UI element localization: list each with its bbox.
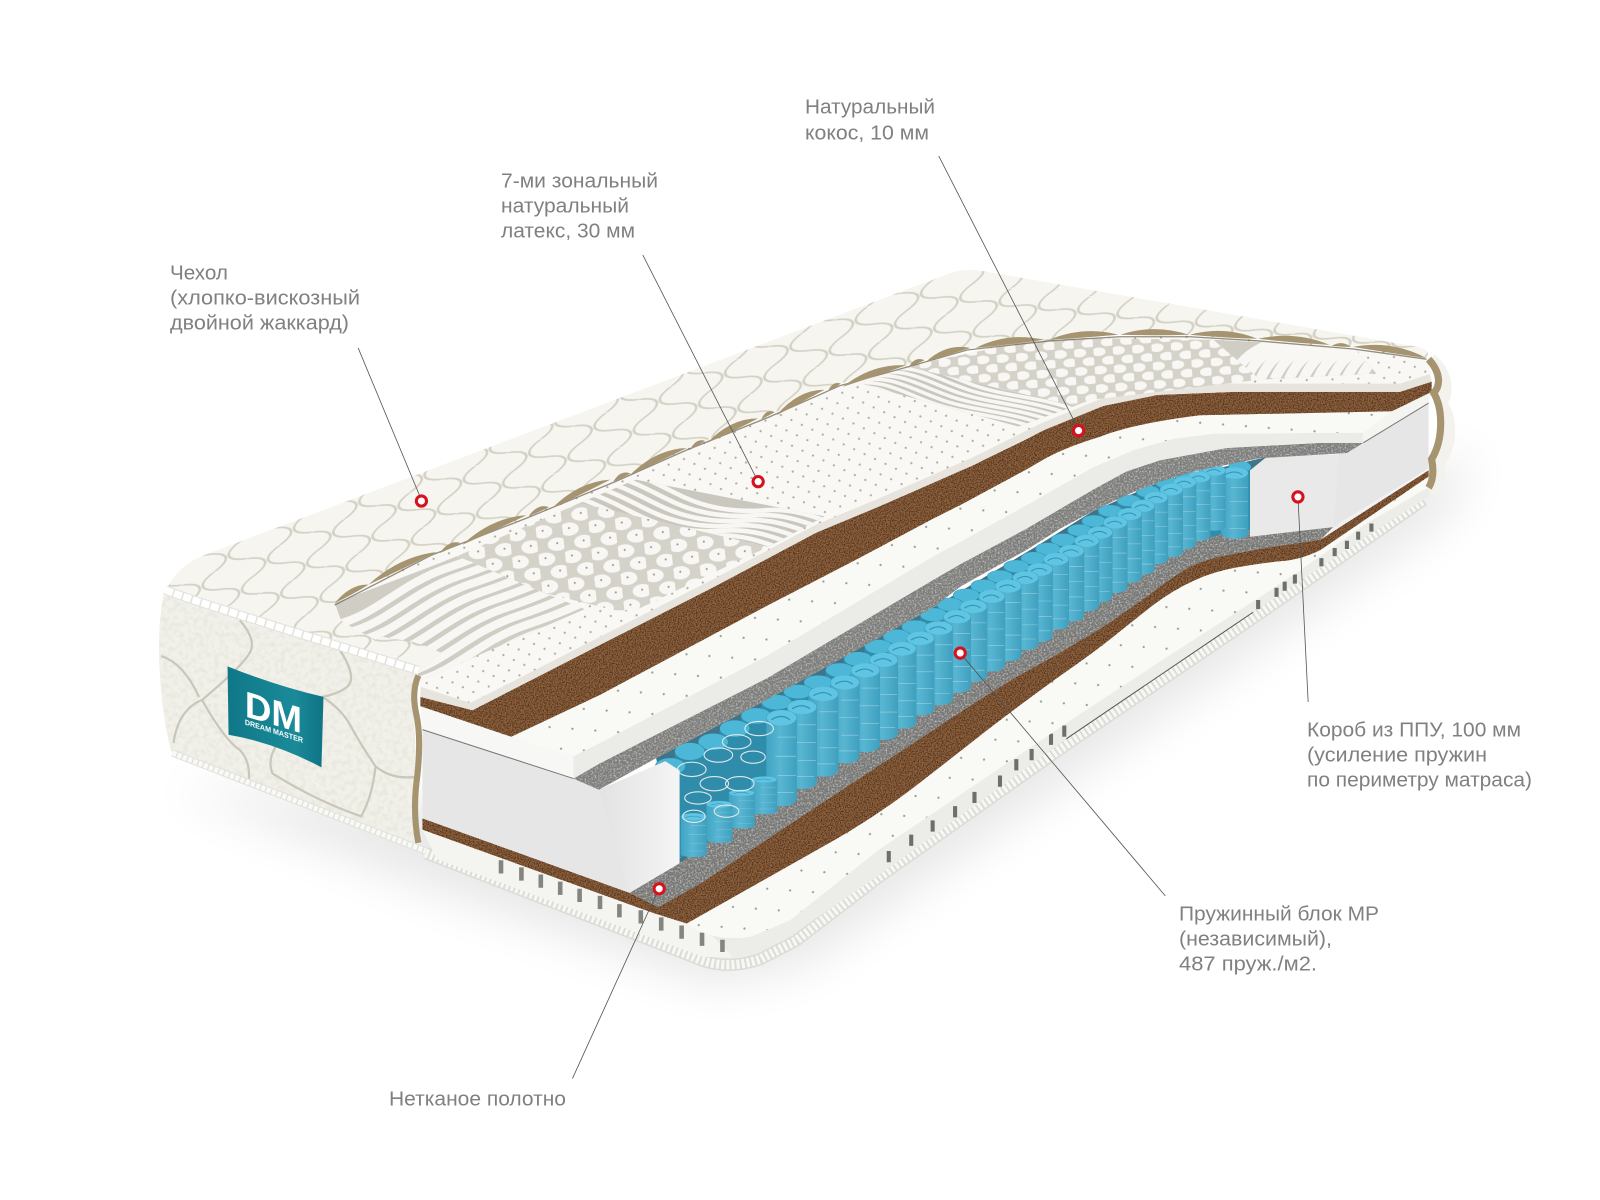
wave zone four — [1214, 340, 1376, 380]
cover cut edge scallops — [335, 329, 1427, 603]
latex side face — [573, 433, 1363, 779]
side lower rope — [172, 753, 426, 851]
bottom latex layer — [422, 477, 1430, 957]
bottom piping cord — [426, 500, 1423, 965]
label: foam box: по периметру матраса) — [1307, 770, 1532, 792]
label: latex — [501, 170, 658, 242]
bare wire springs — [678, 721, 773, 822]
floor shadow — [168, 449, 1474, 985]
upper latex layer — [420, 392, 1432, 779]
zoned latex edge — [335, 335, 1432, 710]
leader lines — [358, 156, 1308, 1079]
label: latex: 7-ми зональный — [501, 170, 658, 192]
cover seam shadow line — [335, 337, 1427, 605]
wave zone one — [335, 556, 584, 680]
bottom latex side line — [1066, 612, 1253, 739]
label: coconut — [805, 96, 935, 144]
bottom latex front teeth — [422, 830, 733, 957]
side panel quilting — [161, 620, 418, 816]
pocket springs back row — [655, 461, 1251, 860]
side panel fabric — [159, 590, 418, 845]
bottom latex side slots — [889, 523, 1371, 862]
lower felt layer — [630, 510, 1334, 907]
cover top surface — [163, 270, 1428, 672]
brand logo: DM — [245, 683, 302, 741]
wave zone three — [860, 366, 1074, 426]
teeth slots — [501, 860, 722, 952]
latex box contact lines — [422, 403, 1429, 779]
cover cut edge side — [414, 676, 419, 843]
label: cover — [170, 262, 360, 334]
egg crate zone near — [457, 503, 768, 610]
right foam outer face — [1334, 403, 1429, 527]
callout markers — [416, 426, 1303, 894]
wave zone two — [580, 480, 824, 547]
upper felt layer — [573, 443, 1363, 790]
zoned latex surface — [335, 335, 1432, 703]
label: spring block — [1179, 904, 1379, 976]
top piping rope — [165, 590, 418, 670]
cover side panel — [159, 590, 426, 851]
label: foam box: Короб из ППУ, 100 мм — [1307, 720, 1521, 742]
label: cover: Чехол — [170, 262, 228, 284]
foam box side face — [422, 730, 630, 893]
mattress illustration — [159, 156, 1474, 1079]
label: nonwoven: Нетканое полотно — [389, 1088, 566, 1110]
egg crate zone far — [906, 338, 1260, 406]
left foam box section — [422, 730, 680, 893]
label tag — [228, 666, 323, 767]
right foam inner face — [1250, 454, 1339, 537]
zoned latex layer — [327, 335, 1432, 710]
right edge of cover — [1429, 359, 1449, 492]
latex top surface — [511, 411, 1392, 756]
label: cover: двойной жаккард) — [170, 312, 349, 334]
brand label — [228, 666, 323, 767]
label: foam box: (усиление пружин — [1307, 744, 1487, 766]
bottom latex surface — [687, 477, 1430, 938]
label: spring block: 487 пруж./м2. — [1179, 954, 1317, 976]
bottom latex side face — [714, 487, 1430, 957]
label: spring block: Пружинный блок МР — [1179, 904, 1379, 926]
label: latex: латекс, 30 мм — [501, 220, 635, 242]
label: foam box — [1307, 720, 1532, 792]
right foam box section — [1250, 403, 1429, 537]
label: coconut: кокос, 10 мм — [805, 122, 929, 144]
dark cavity behind springs — [656, 457, 1266, 863]
label: cover: (хлопко-вискозный — [170, 288, 360, 310]
label: spring block: (независимый), — [1179, 928, 1332, 950]
latex end face — [1363, 392, 1432, 443]
pocket springs front row — [681, 465, 1248, 857]
label: latex: натуральный — [501, 196, 629, 218]
label: coconut: Натуральный — [805, 96, 935, 118]
latex front face — [420, 706, 573, 779]
top coconut layer — [420, 382, 1432, 737]
brand name: DREAM MASTER — [245, 718, 303, 745]
bottom coconut layer — [422, 470, 1429, 923]
foam box end face — [599, 761, 680, 893]
